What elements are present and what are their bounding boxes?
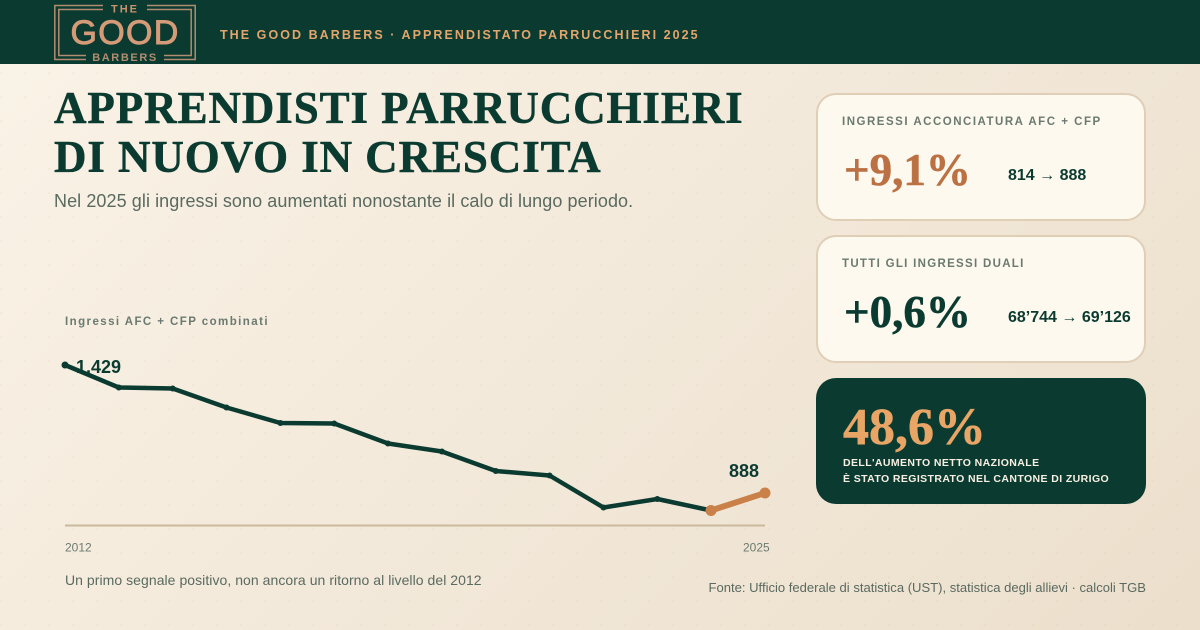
panel value: 48,6%: [843, 399, 986, 456]
value label 888: 888: [729, 461, 759, 481]
panel label: INGRESSI ACCONCIATURA AFC + CFP: [842, 116, 1102, 128]
subtitle: Nel 2025 gli ingressi sono aumentati nonostante il calo di lungo periodo.: [54, 191, 633, 211]
panel change: 68’744 → 69’126: [1008, 309, 1131, 326]
logo: The Good Barbers: THE: [111, 4, 139, 16]
panel value: +0,6%: [844, 287, 971, 337]
panel label: TUTTI GLI INGRESSI DUALI: [842, 258, 1025, 270]
panel description: È STATO REGISTRATO NEL CANTONE DI ZURIGO: [843, 473, 1109, 485]
logo: The Good Barbers: BARBERS: [92, 52, 158, 64]
panel value: +9,1%: [844, 145, 971, 195]
value label 1429: 1,429: [76, 357, 121, 377]
source: Fonte: Ufficio federale di statistica (UST), statistica degli allievi · calcoli TGB: [709, 580, 1146, 595]
panel description: [843, 457, 1109, 485]
panel change: 814 → 888: [1008, 167, 1086, 184]
panel description: DELL'AUMENTO NETTO NAZIONALE: [843, 457, 1039, 469]
panel: ingressi acconciatura: [816, 93, 1146, 221]
title: [54, 83, 744, 182]
line chart: [62, 357, 770, 554]
title: DI NUOVO IN CRESCITA: [54, 132, 602, 182]
header bar: [0, 0, 1200, 64]
series: 2012 to 2024: [62, 362, 711, 510]
chart label: Ingressi AFC + CFP combinati: [65, 316, 269, 328]
axis label 2025: 2025: [743, 540, 770, 554]
panel: cantone di Zurigo: [816, 378, 1146, 504]
logo: The Good Barbers: [54, 4, 196, 64]
chart note: Un primo segnale positivo, non ancora un ritorno al livello del 2012: [65, 572, 482, 588]
title: APPRENDISTI PARRUCCHIERI: [54, 83, 744, 133]
axis label 2012: 2012: [65, 540, 92, 554]
series: 2024 to 2025 highlight: [706, 488, 770, 516]
header label: THE GOOD BARBERS · APPRENDISTATO PARRUCCHIERI 2025: [220, 28, 700, 42]
logo: The Good Barbers: GOOD: [70, 14, 180, 52]
panel: tutti gli ingressi duali: [816, 235, 1146, 363]
